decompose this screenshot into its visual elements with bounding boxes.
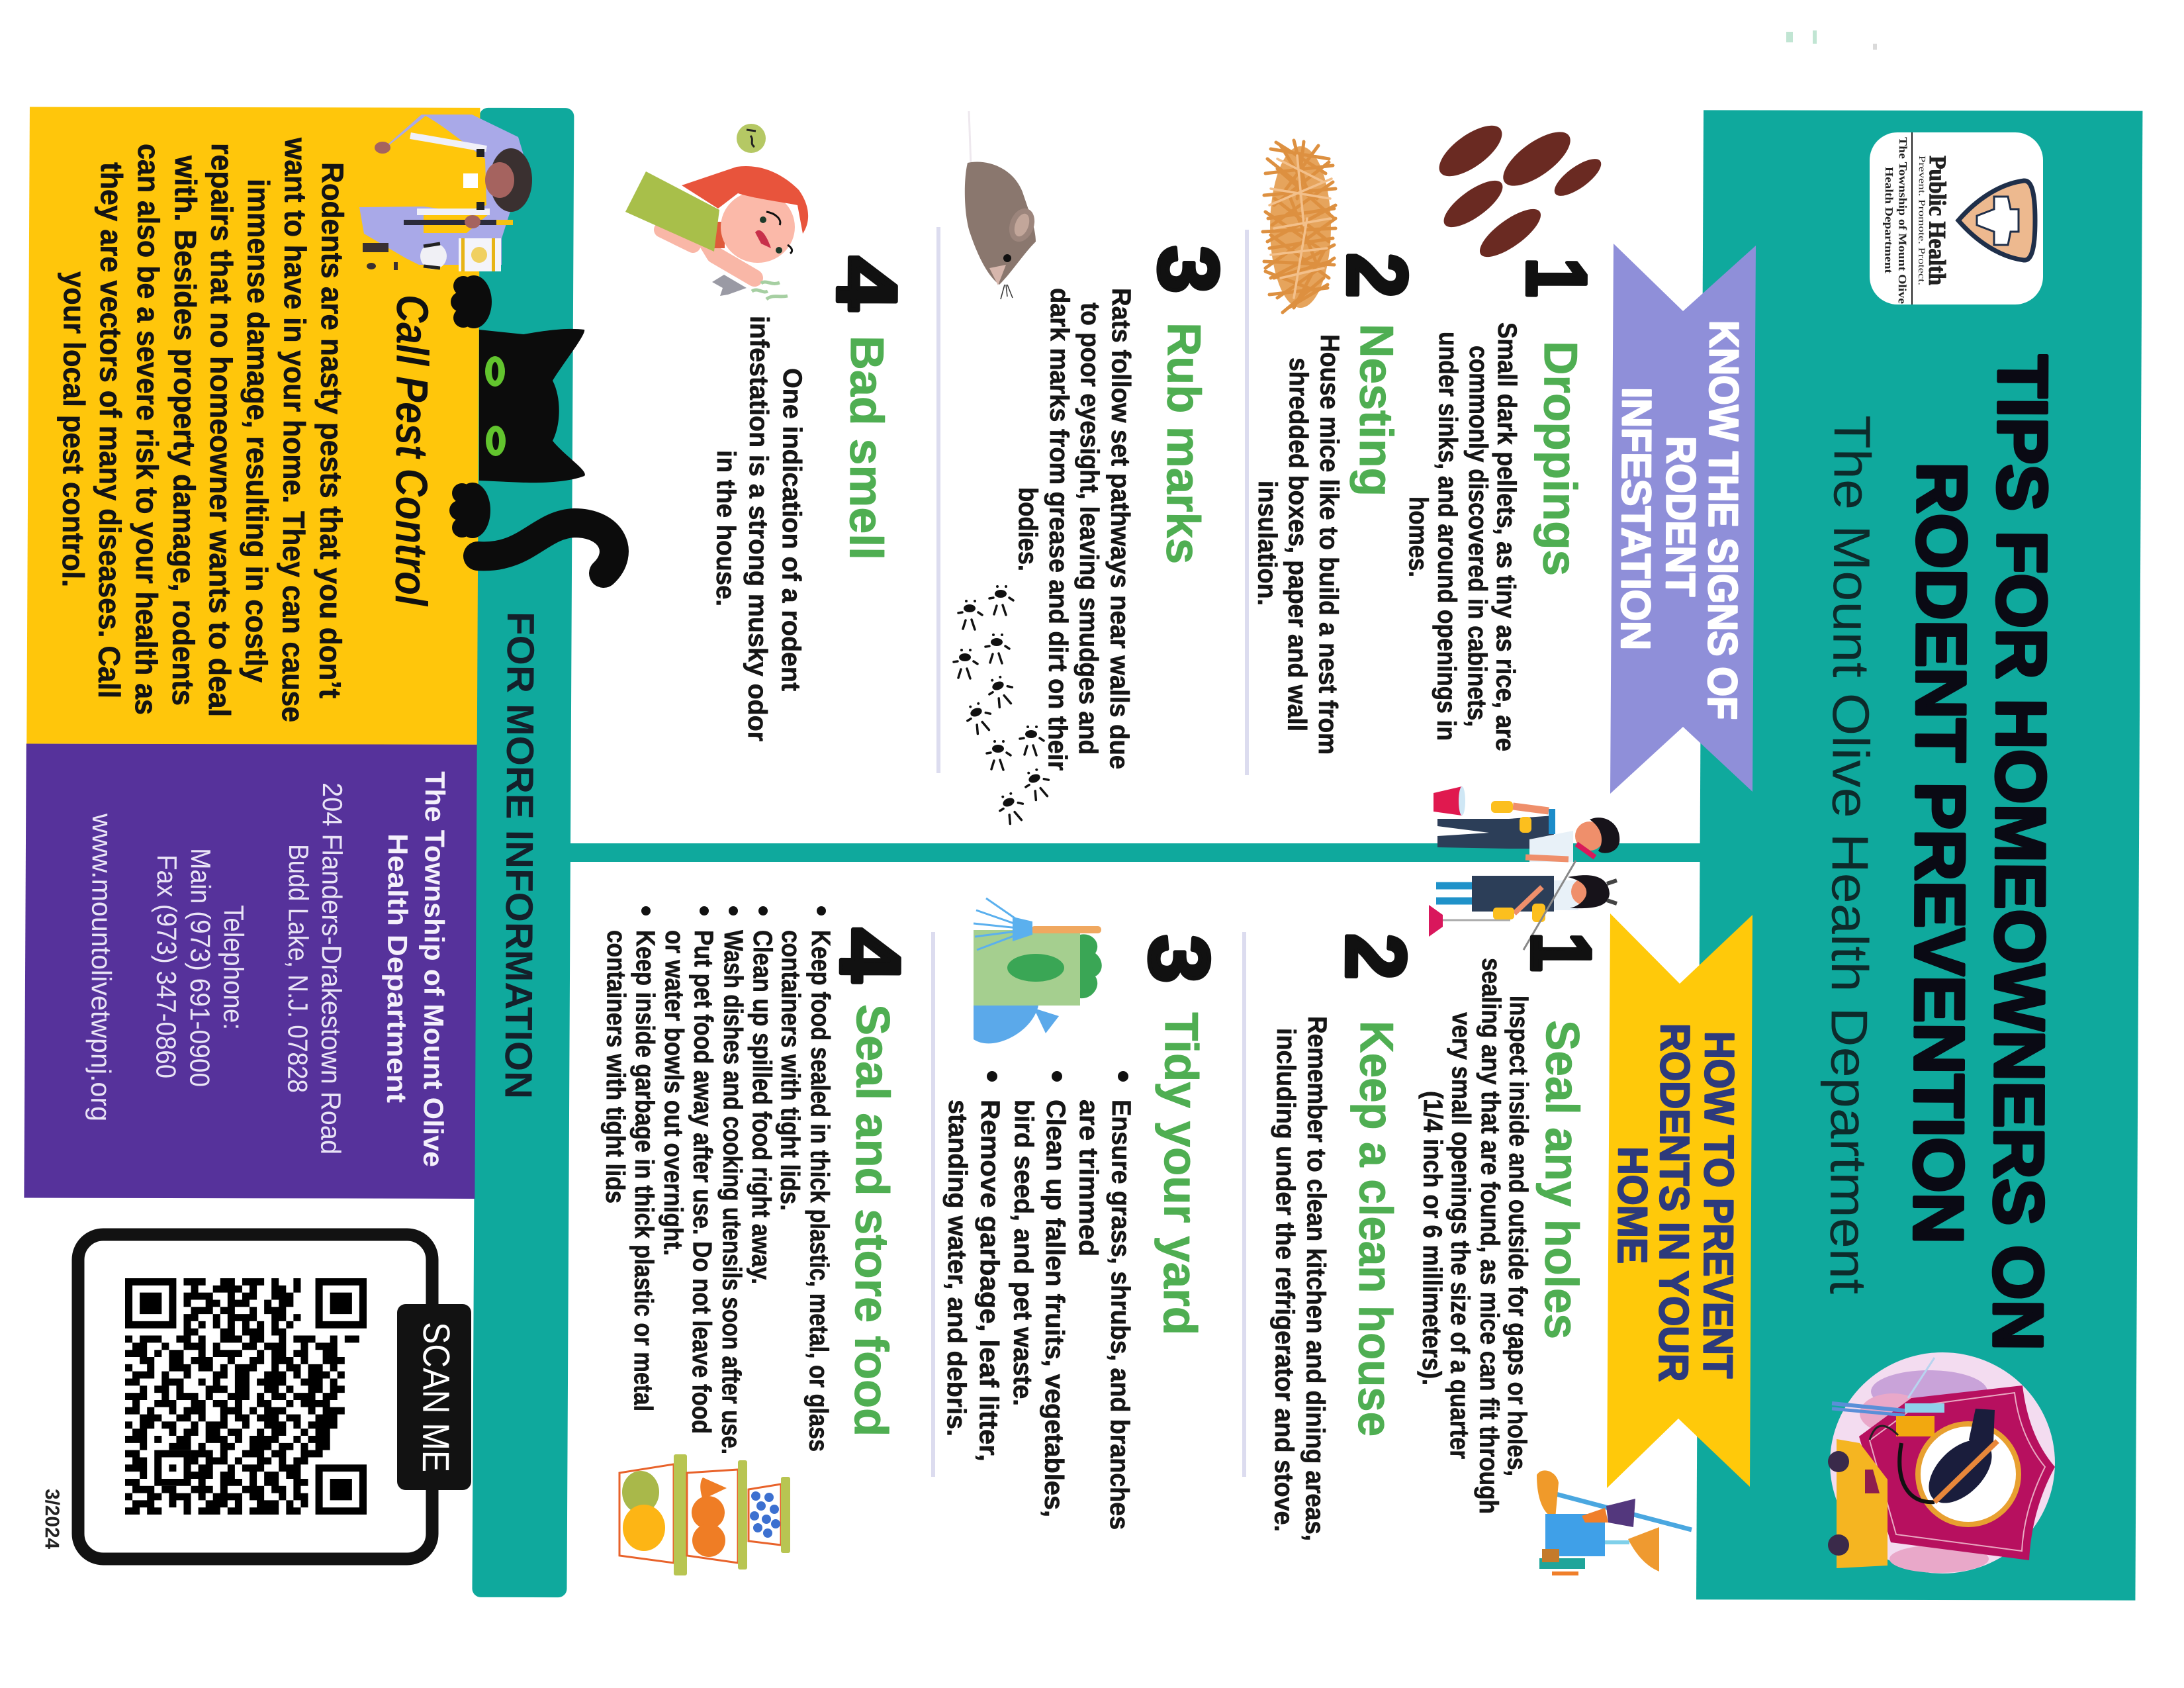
text: pest control paragraph: with. Besides property damage, rodents	[166, 155, 203, 706]
section: store food tip: containers with tight lids.	[775, 930, 805, 1211]
logo: public health badge: The Township of Mount Olive	[1896, 137, 1909, 305]
text: contact details: 204 Flanders-Drakestown Road	[315, 782, 348, 1154]
ribbon: know the signs: INFESTATION	[1612, 387, 1659, 650]
text: pest control paragraph: Rodents are nasty pests that you don’t	[313, 162, 350, 698]
section: dropping sign: commonly discovered in cabinets,	[1462, 346, 1493, 727]
section: rub marks sign: 3	[1141, 246, 1236, 294]
divider	[1242, 932, 1246, 1477]
section: dropping sign: homes.	[1403, 496, 1433, 577]
section: tidy yard tip: standing water, and debris.	[942, 1100, 972, 1436]
text: contact details: Health Department	[381, 833, 414, 1103]
section: nesting sign: shredded boxes, paper and wall	[1282, 357, 1313, 731]
section: nesting sign: insulation.	[1252, 481, 1282, 606]
ribbon: know the signs	[1610, 244, 1756, 794]
text: contact details: www.mountolivetwpnj.org	[85, 813, 118, 1121]
icon: person smelling odor	[625, 124, 808, 299]
text: contact details	[85, 771, 451, 1167]
section: dropping sign: under sinks, and around openings in	[1432, 332, 1463, 741]
icon: rake and yard	[974, 898, 1102, 1043]
icon: nest	[1263, 140, 1336, 312]
section: store food tip: Clean up spilled food right away.	[746, 930, 777, 1284]
panel: sidebar teal column	[472, 108, 574, 1597]
illustration: black cat	[449, 275, 614, 573]
section: nesting sign: Nesting	[1349, 324, 1402, 496]
section: seal holes tip: very small openings the size of a quarter	[1445, 1012, 1476, 1459]
ribbon: know the signs: RODENT	[1657, 436, 1704, 596]
section: clean house tip: Remember to clean kitchen and dining areas,	[1300, 1016, 1332, 1541]
section: store food tip	[600, 906, 917, 1454]
illustration: exterminator	[359, 115, 532, 271]
icon: food containers	[619, 1454, 790, 1575]
section: seal holes tip: Inspect inside and outside for gaps or holes,	[1502, 996, 1533, 1476]
section: bad smell sign: 4	[819, 256, 914, 311]
section: rub marks sign	[965, 111, 1236, 771]
icon: cleaning supplies	[1537, 1470, 1692, 1573]
icon: paw prints trail	[954, 585, 1054, 826]
ribbon: know the signs: KNOW THE SIGNS OF	[1699, 320, 1747, 720]
text: pest control paragraph: repairs that no homeowner wants to deal	[203, 143, 240, 717]
icon: mouse	[965, 111, 1039, 299]
scan me tab	[397, 1304, 471, 1490]
text: contact details: Main (973) 691-0900	[184, 848, 216, 1087]
scan me tab: SCAN ME	[414, 1322, 457, 1472]
section: nesting sign: 2	[1330, 253, 1424, 299]
section: tidy yard tip: are trimmed	[1073, 1100, 1103, 1256]
text: contact details: Fax (973) 347-0860	[150, 855, 183, 1078]
section: store food tip: Keep food sealed in thick plastic, metal, or glass	[803, 930, 835, 1452]
section: store food tip: Keep inside garbage in thick plastic or metal	[628, 930, 660, 1411]
text: pest control paragraph: immense damage, resulting in costly	[239, 179, 276, 683]
section: dropping sign: Small dark pellets, as tiny as rice, are	[1490, 322, 1522, 751]
section: tidy yard tip: Ensure grass, shrubs, and branches	[1105, 1100, 1136, 1530]
section: tidy yard tip	[942, 898, 1226, 1530]
section: seal holes tip: sealing any that are found, as mice can fit through	[1474, 958, 1506, 1514]
logo: public health badge	[1870, 132, 2043, 305]
section: seal holes tip: 1	[1514, 932, 1608, 972]
section: tidy yard tip: Tidy your yard	[1154, 1012, 1207, 1335]
qr code	[125, 1278, 367, 1515]
ribbon: how to prevent: RODENTS IN YOUR	[1650, 1023, 1698, 1382]
cat paws	[449, 275, 492, 538]
section: seal holes tip: Seal any holes	[1535, 1020, 1588, 1339]
main title: TIPS FOR HOMEOWNERS ON	[1979, 355, 2062, 1350]
section: bad smell sign: Bad smell	[839, 336, 893, 560]
qr code card	[78, 1235, 471, 1559]
logo: public health badge: Public Health	[1924, 156, 1951, 285]
section: bad smell sign	[625, 124, 914, 741]
section: bad smell sign: One indication of a rodent	[776, 368, 807, 691]
logo: public health badge: Health Department	[1882, 167, 1895, 273]
heading: call pest control: Call Pest Control	[386, 295, 437, 607]
icon: droppings	[1432, 117, 1606, 265]
section: seal holes tip	[1417, 932, 1692, 1573]
panel: call pest control yellow	[26, 107, 480, 745]
section: tidy yard tip: Remove garbage, leaf litter,	[974, 1100, 1005, 1462]
section: dropping sign	[1403, 117, 1606, 751]
logo: public health badge: Prevent. Promote. Protect.	[1916, 156, 1927, 285]
scan artefacts	[1786, 30, 1877, 50]
text: pest control paragraph: your local pest control.	[56, 271, 92, 587]
date stamp: 3/2024	[41, 1489, 63, 1549]
section: store food tip: Put pet food away after use. Do not leave food	[686, 930, 718, 1434]
section: clean house tip: including under the refrigerator and stove.	[1269, 1028, 1300, 1532]
main title	[1899, 355, 2062, 1350]
section: rub marks sign: to poor eyesight, leaving smudges and	[1073, 303, 1105, 755]
section: bad smell sign: in the house.	[711, 450, 741, 606]
text: contact details: Budd Lake, N.J. 07828	[282, 844, 314, 1093]
divider	[931, 932, 935, 1477]
text: contact details: The Township of Mount Olive	[418, 771, 451, 1167]
divider	[936, 227, 940, 773]
section: tidy yard tip: 3	[1132, 935, 1226, 984]
section: nesting sign	[1252, 140, 1424, 755]
section: clean house tip	[1269, 933, 1423, 1541]
heading: for more information: FOR MORE INFORMATION	[496, 612, 542, 1099]
section: store food tip: 4	[823, 928, 917, 983]
section: bad smell sign: infestation is a strong musky odor	[743, 316, 774, 741]
ribbon: how to prevent	[1607, 914, 1752, 1488]
ribbon: how to prevent: HOW TO PREVENT	[1694, 1031, 1742, 1378]
section: clean house tip: 2	[1328, 933, 1423, 980]
panel: contact purple	[24, 744, 477, 1199]
text: contact details: Telephone:	[218, 905, 250, 1030]
section: clean house tip: Keep a clean house	[1348, 1021, 1402, 1436]
section: tidy yard tip: Clean up fallen fruits, vegetables,	[1039, 1100, 1070, 1517]
section: rub marks sign: bodies.	[1013, 487, 1042, 571]
section: store food tip: containers with tight lids	[600, 930, 631, 1203]
main title: RODENT PREVENTION	[1899, 462, 1981, 1244]
section: store food tip: or water bowls out overnight.	[659, 930, 689, 1256]
section: seal holes tip: (1/4 inch or 6 millimeters).	[1417, 1091, 1447, 1385]
section: tidy yard tip: bird seed, and pet waste.	[1008, 1100, 1038, 1406]
ribbon: how to prevent: HOME	[1609, 1147, 1655, 1264]
text: pest control paragraph: they are vectors of many diseases. Call	[92, 162, 129, 698]
section: rub marks sign: dark marks from grease and dirt on their	[1042, 288, 1074, 771]
cat eyes	[485, 356, 506, 456]
section: rub marks sign: Rats follow set pathways near walls due	[1104, 288, 1136, 769]
text: pest control paragraph: want to have in your home. They can cause	[276, 137, 313, 722]
subtitle: The Mount Olive Health Department	[1819, 415, 1882, 1295]
section: dropping sign: Droppings	[1533, 341, 1586, 576]
illustration: no rodents badge	[1828, 1352, 2055, 1573]
section: store food tip: Seal and store food	[844, 1004, 899, 1436]
divider	[1245, 230, 1249, 775]
text: pest control paragraph	[56, 137, 350, 722]
centre divider strip	[569, 843, 1702, 862]
section: dropping sign: 1	[1509, 258, 1604, 298]
panel: header band	[1696, 110, 2142, 1601]
section: store food tip: Wash dishes and cooking utensils soon after use.	[716, 930, 748, 1454]
section: rub marks sign: Rub marks	[1156, 322, 1210, 564]
illustration: cleaners	[1429, 786, 1619, 950]
text: pest control paragraph: can also be a severe risk to your health as	[129, 144, 166, 715]
section: nesting sign: House mice like to build a nest from	[1313, 334, 1344, 755]
